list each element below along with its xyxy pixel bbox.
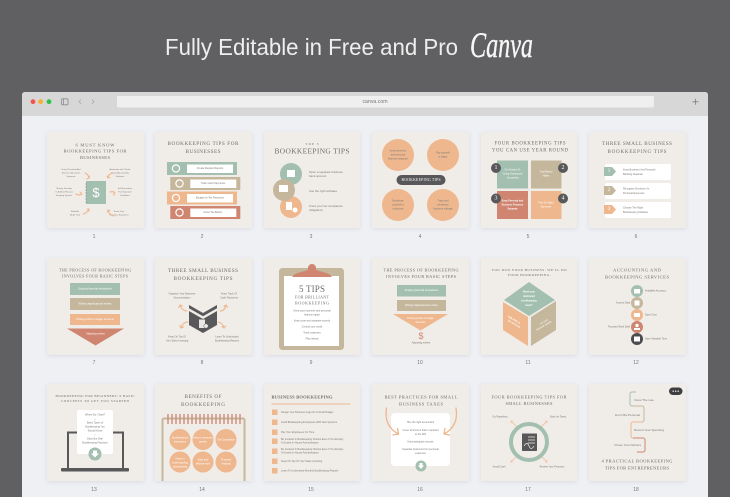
heading: BUSINESS TAXES	[399, 402, 443, 406]
heading	[602, 458, 673, 470]
service labels: Available Accuracy	[645, 290, 667, 292]
heading: BOOKKEEPING TIPS FOR	[64, 148, 127, 154]
panel: template 9	[264, 258, 360, 355]
tips text: Use the right software	[309, 189, 338, 193]
tips text: Open a separate business	[309, 170, 343, 174]
page number: 5	[527, 234, 530, 240]
circle text: Track and	[437, 200, 449, 202]
heading: THREE SMALL BUSINESS	[602, 141, 672, 147]
benefit labels	[172, 436, 235, 468]
list text: Be Involved In Bookkeeping Checks Even If You Employ	[281, 438, 344, 441]
list text: Avoid Bookkeeping Employees With New Systems	[281, 421, 338, 424]
heading: YOUR BOOKKEEPING.	[508, 273, 551, 277]
tips text: Set Reminders	[118, 187, 133, 190]
text card	[391, 413, 450, 466]
page number: 8	[201, 360, 204, 366]
list text: Pay Your Employees On Time	[281, 431, 315, 434]
heading	[602, 141, 672, 155]
rows: Recognize Business Vs	[623, 188, 650, 190]
navigation icons	[62, 99, 94, 105]
laptop	[61, 432, 129, 472]
panel: template 16	[372, 384, 469, 481]
heading: SMALL BUSINESSES	[506, 401, 553, 406]
funnel bars	[67, 283, 124, 346]
panel: template 5	[481, 132, 577, 228]
heading: BOOKKEEPING	[181, 402, 225, 408]
heading: BOOKKEEPING TIPS FOR	[168, 141, 239, 147]
rows: Choose The Right	[623, 206, 643, 210]
tips list: Keep your business and personal	[293, 310, 331, 312]
quadrants: Expenses	[541, 206, 552, 208]
heading: BEST PRACTICES FOR SMALL	[384, 394, 458, 400]
page number: 7	[93, 360, 96, 366]
curved arrows	[386, 408, 456, 435]
path labels: Record Your Spending	[634, 428, 664, 432]
service labels: Save Cost	[645, 314, 657, 316]
quadrants: Accounting	[507, 176, 519, 180]
quadrants: Plan On Major	[538, 202, 554, 204]
cube diagram: financial details	[536, 320, 553, 332]
number badges: 3	[494, 196, 498, 202]
tips text: Keeping System	[56, 194, 72, 197]
icon: document	[522, 434, 537, 451]
step bars	[167, 162, 240, 219]
heading	[384, 268, 458, 279]
tips text: Know Your	[114, 210, 124, 213]
note card: Should Know	[88, 430, 103, 432]
heading: BOOKKEEPING TIPS	[608, 149, 667, 155]
list text: A Growth In-House Administrators	[281, 442, 319, 444]
quadrants: Goal-Based	[540, 170, 553, 174]
benefit labels: Tax Compliance	[217, 438, 235, 442]
circle text: and personal	[391, 154, 406, 156]
winding path	[630, 392, 645, 452]
tip labels: Review Your Finances	[540, 466, 565, 468]
arrows	[178, 305, 228, 328]
heading: TIPS FOR ENTREPRENEURS	[605, 466, 669, 470]
more options pill	[669, 388, 682, 395]
benefit labels: Helps in business	[193, 436, 214, 440]
heading	[492, 394, 567, 406]
list text: Keep On Top Of Your Sales Invoicing	[281, 460, 323, 463]
page number: 15	[308, 487, 314, 493]
path labels: Don't Mix Personal	[615, 413, 640, 417]
funnel: accounts	[415, 321, 426, 324]
path labels: Know The Law	[634, 398, 655, 402]
rows: 2	[608, 188, 611, 193]
icon: download circle	[416, 460, 426, 472]
list text: Learn To Understand Monthly Bookkeeping Reports	[281, 469, 339, 472]
cube diagram: Talk with us	[507, 315, 521, 325]
tips text: For Important	[118, 190, 132, 194]
tips text	[56, 168, 133, 216]
heading: THREE SMALL BUSINESS	[168, 268, 238, 274]
address bar	[117, 96, 654, 108]
tips text: Closely Develop	[56, 188, 73, 190]
tip labels: Avoid Cash	[493, 466, 506, 468]
quadrants	[497, 160, 562, 219]
cube diagram: team?	[525, 304, 533, 307]
text card: Keep adequate records	[408, 440, 434, 444]
funnel bars: Writing original journal entries	[79, 302, 112, 306]
text card: expenses	[415, 452, 427, 455]
heading rule	[272, 404, 350, 405]
heading: INVOLVES FOUR BASIC STEPS	[386, 274, 457, 279]
tips text: Based Accounting	[111, 172, 130, 174]
heading: YOU CAN USE YEAR ROUND	[492, 148, 569, 154]
panel: template 11	[481, 258, 577, 355]
page number: 6	[635, 234, 638, 240]
circle text	[388, 150, 453, 210]
ring	[511, 424, 547, 460]
tip labels: Go Paperless	[492, 416, 508, 418]
cube diagram: bookkeeping	[521, 300, 537, 302]
text card: Separate business from personal	[402, 448, 439, 451]
text card: to the IRS	[415, 433, 426, 436]
path labels	[614, 398, 664, 447]
tips text: Your Sales Invoicing	[166, 340, 189, 342]
title: Fully Editable in Free and Pro	[165, 34, 458, 60]
tips text: Build An	[71, 210, 80, 213]
page number: 3	[310, 234, 313, 240]
tips text: In A More Record	[56, 190, 73, 194]
panel: template 2	[155, 132, 252, 228]
panel: template 1	[47, 132, 144, 228]
tips text: Keep Track Of	[221, 292, 237, 296]
page number: 12	[633, 360, 639, 366]
panel: template 12	[589, 258, 686, 355]
heading: THE PROCESS OF BOOKKEEPING	[384, 268, 458, 272]
title: Canva	[470, 25, 533, 65]
tips text: Keep On Top Of	[168, 336, 186, 338]
list text: Design Your Business Logo On A Small Budget	[281, 411, 334, 414]
page number: 17	[525, 487, 531, 493]
new tab plus	[692, 99, 698, 105]
tips text: Audit Trail	[70, 214, 80, 216]
cube diagram	[503, 282, 556, 346]
panel: template 18	[589, 384, 686, 481]
tips list: Control your credit	[302, 326, 323, 328]
number badges: 1	[494, 165, 498, 171]
page number: 9	[310, 360, 313, 366]
heading: BUSINESSES	[80, 155, 110, 160]
tips text: Know your tax compliance	[309, 204, 343, 208]
benefit labels: growth	[199, 440, 207, 444]
note card: Bookkeeping You	[85, 426, 105, 428]
text card: Hire the right accountant	[407, 421, 434, 424]
tips heading: 5 TIPS	[299, 284, 325, 294]
benefit labels: efficient work	[196, 462, 211, 466]
panel: template 10	[372, 258, 469, 355]
tips text: Deadlines	[120, 195, 131, 197]
rows: Bookkeeping Software	[623, 211, 649, 214]
heading: CONCEPTS TO GET YOU STARTED	[61, 399, 130, 403]
path labels: Chose Your Debtors	[614, 443, 641, 447]
list text: A Growth In-House Administrators	[281, 452, 319, 454]
tips list: Plan ahead	[306, 338, 319, 340]
notebook frame	[162, 418, 244, 481]
tip labels	[492, 416, 567, 468]
note card: Bookkeeping Practices	[82, 442, 108, 444]
circle text: finances separate	[388, 158, 408, 160]
rows: Keep Business And Personal	[623, 168, 656, 172]
tips text: Cash Payments	[220, 296, 239, 300]
tips text: Business Expenses	[109, 214, 129, 216]
heading	[274, 142, 350, 156]
page number: 16	[417, 487, 423, 493]
radiating arrows	[511, 421, 547, 462]
funnel bars: Adjusting entries	[86, 332, 105, 336]
heading: BOOKKEEPING FOR BEGINNERS: 6 BASIC	[56, 394, 135, 398]
heading: BUSINESS BOOKKEEPING	[272, 394, 333, 400]
service labels: Focused Work Staff	[608, 326, 630, 328]
service labels	[608, 290, 668, 340]
benefit labels: Analysis	[221, 462, 231, 466]
center pill: BOOKKEEPING TIPS	[402, 178, 440, 182]
rows: 3	[608, 207, 611, 212]
heading: BOOKKEEPING SERVICES	[605, 274, 669, 280]
icon circles	[273, 163, 302, 218]
circle text: Bookkeep	[392, 200, 404, 202]
tips text: Documentation	[174, 296, 191, 300]
arrows	[76, 173, 115, 216]
clipboard	[279, 264, 344, 350]
panel: template 7	[47, 258, 144, 355]
service icons column	[631, 285, 643, 345]
tips text: Automate with Cloud-	[110, 168, 131, 171]
circle text: yourself to	[392, 204, 404, 206]
benefit labels: bookkeeping	[173, 466, 188, 468]
heading	[492, 268, 567, 277]
page number: 14	[199, 487, 205, 493]
rows: Personal Expenses	[623, 192, 645, 195]
title	[165, 25, 533, 65]
heading	[168, 268, 238, 282]
page number: 1	[93, 234, 96, 240]
heading: FOUR BOOKKEEPING TIPS	[494, 142, 566, 146]
tips text: Business Accounts	[62, 172, 81, 174]
heading: 6 MUST KNOW	[76, 142, 115, 148]
browser window	[22, 92, 708, 497]
benefit labels: Easy and	[198, 458, 209, 462]
tips list	[293, 310, 331, 340]
heading	[492, 142, 569, 154]
heading: INVOLVES FOUR BASIC STEPS	[62, 274, 128, 278]
heading: 4 PRACTICAL BOOKKEEPING	[602, 458, 673, 464]
list text	[281, 411, 344, 472]
number badges: 4	[562, 196, 564, 202]
cube diagram: Need your	[523, 290, 535, 294]
quadrants: Get Serious Or	[505, 168, 521, 172]
tips text: Keep Personal And	[62, 168, 81, 171]
funnel: Writing original journal entries	[405, 304, 439, 307]
panel: template 14	[155, 384, 252, 481]
heading	[605, 268, 669, 280]
circle text: a salary	[439, 156, 448, 158]
tips text: Learn To Understand	[215, 336, 239, 338]
benefit labels: Financial	[221, 458, 231, 462]
funnel: Posting entries to ledger	[407, 317, 434, 320]
tips text: Bookkeeping Reports	[215, 340, 240, 342]
page number: 4	[419, 234, 422, 240]
note card: Basic Types of	[87, 422, 103, 424]
number badges: 2	[562, 165, 564, 171]
cube diagram: dedicated	[523, 295, 535, 298]
funnel bars: Posting entries to ledger accounts	[76, 318, 115, 321]
quadrants: Separate	[507, 208, 518, 210]
benefit labels: understanding	[172, 462, 189, 464]
panel: template 6	[589, 132, 686, 228]
tips heading: BOOKKEEPING	[295, 300, 329, 306]
panel: template 15	[264, 384, 360, 481]
quadrants: Business Finances	[502, 204, 524, 206]
circle text: Pay yourself	[436, 152, 450, 154]
step bars: Track Cash Payments	[201, 182, 226, 185]
circle text: outsource	[393, 208, 404, 210]
panel: template 8	[155, 258, 252, 355]
notebook spiral	[168, 414, 240, 424]
tip labels: Save for Taxes	[550, 416, 567, 418]
quadrants: Keep Personal and	[502, 200, 524, 202]
text card: Cover all income that is reported	[402, 429, 439, 432]
rows: Banking Separate	[623, 173, 643, 176]
step bars: Know Tax Basics	[204, 211, 223, 214]
panel: template 17	[481, 384, 577, 481]
window control dots	[31, 99, 51, 104]
tips text	[166, 292, 240, 342]
numbered list markers	[272, 410, 278, 474]
heading	[384, 394, 458, 406]
tips text	[309, 170, 343, 212]
page number: 18	[633, 487, 639, 493]
tips text: obligations	[309, 208, 323, 212]
tips text: Software	[116, 175, 125, 178]
page number: 10	[417, 360, 423, 366]
heading	[181, 394, 225, 408]
dollar icon: $	[418, 331, 424, 341]
heading: BOOKKEEPING TIPS	[174, 276, 233, 282]
address bar: canva.com	[362, 99, 388, 105]
heading	[59, 268, 131, 278]
page number: 2	[201, 234, 204, 240]
note card	[77, 410, 113, 454]
icon: open book	[189, 305, 217, 333]
service labels: Save Valuable Time	[645, 338, 668, 340]
rows	[604, 164, 671, 218]
circle text: Keep business	[390, 150, 407, 152]
cube diagram: Get your	[539, 318, 549, 326]
benefit circles	[170, 429, 236, 472]
benefit labels: Bookkeeping's	[172, 436, 189, 440]
icon: download circle	[88, 448, 102, 460]
step bars: Budget for Tax Payments	[196, 197, 225, 200]
heading: BOOKKEEPING TIPS	[274, 146, 350, 156]
service labels: Access Data	[616, 302, 631, 304]
orange circles	[382, 139, 459, 221]
funnel: Studying financial transactions	[405, 289, 439, 292]
page number: 11	[525, 360, 531, 366]
panel: template 13	[47, 384, 144, 481]
tips text: Organize Your Business	[169, 292, 196, 296]
tips list: Keep clear and separate records	[294, 320, 331, 322]
circle text: reimburse	[437, 204, 449, 206]
cube diagram: for success	[507, 319, 521, 329]
tips list: Track expenses	[303, 332, 322, 334]
heading: THE PROCESS OF BOOKKEEPING	[59, 268, 131, 272]
page number: 13	[91, 487, 97, 493]
benefit labels: Importance	[174, 440, 187, 444]
quadrants: Habits	[543, 174, 550, 178]
heading: FOUR BOOKKEEPING TIPS FOR	[492, 394, 567, 400]
tips heading: FOR BRILLIANT	[295, 294, 330, 300]
tips heading	[295, 284, 330, 306]
panel: template 3	[264, 132, 360, 228]
heading: TOP 3	[306, 142, 319, 146]
panel: template 4	[372, 132, 469, 228]
step bars: Create Regular Reports	[197, 167, 224, 170]
heading: BUSINESSES	[186, 149, 221, 155]
list text: Be Involved In Bookkeeping Checks Even If You Employ	[281, 448, 344, 451]
number badges	[491, 163, 568, 204]
funnel bars: Studying financial transactions	[78, 288, 113, 290]
heading	[64, 142, 127, 160]
circle text: business mileage	[433, 208, 453, 210]
heading: BENEFITS OF	[184, 394, 222, 400]
tips text: Separate	[67, 175, 76, 178]
heading: YOU RUN YOUR BUSINESS. WE'LL DO	[492, 268, 567, 272]
caption: Adjusting entries	[412, 342, 431, 344]
note card: Easy But Vital	[87, 438, 103, 440]
note card: Where Do I Start?	[85, 414, 106, 416]
heading	[168, 141, 239, 155]
rows: 1	[608, 169, 611, 174]
quadrants: Going Outsourced	[503, 172, 523, 176]
tips text: bank account	[309, 174, 326, 178]
funnel	[393, 285, 448, 330]
tips list: finances apart	[304, 314, 320, 316]
benefit labels: Helps in	[175, 458, 185, 460]
icon: notepad with dollar: $	[92, 185, 100, 200]
heading: ACCOUNTING AND	[613, 268, 662, 272]
heading	[56, 394, 135, 403]
